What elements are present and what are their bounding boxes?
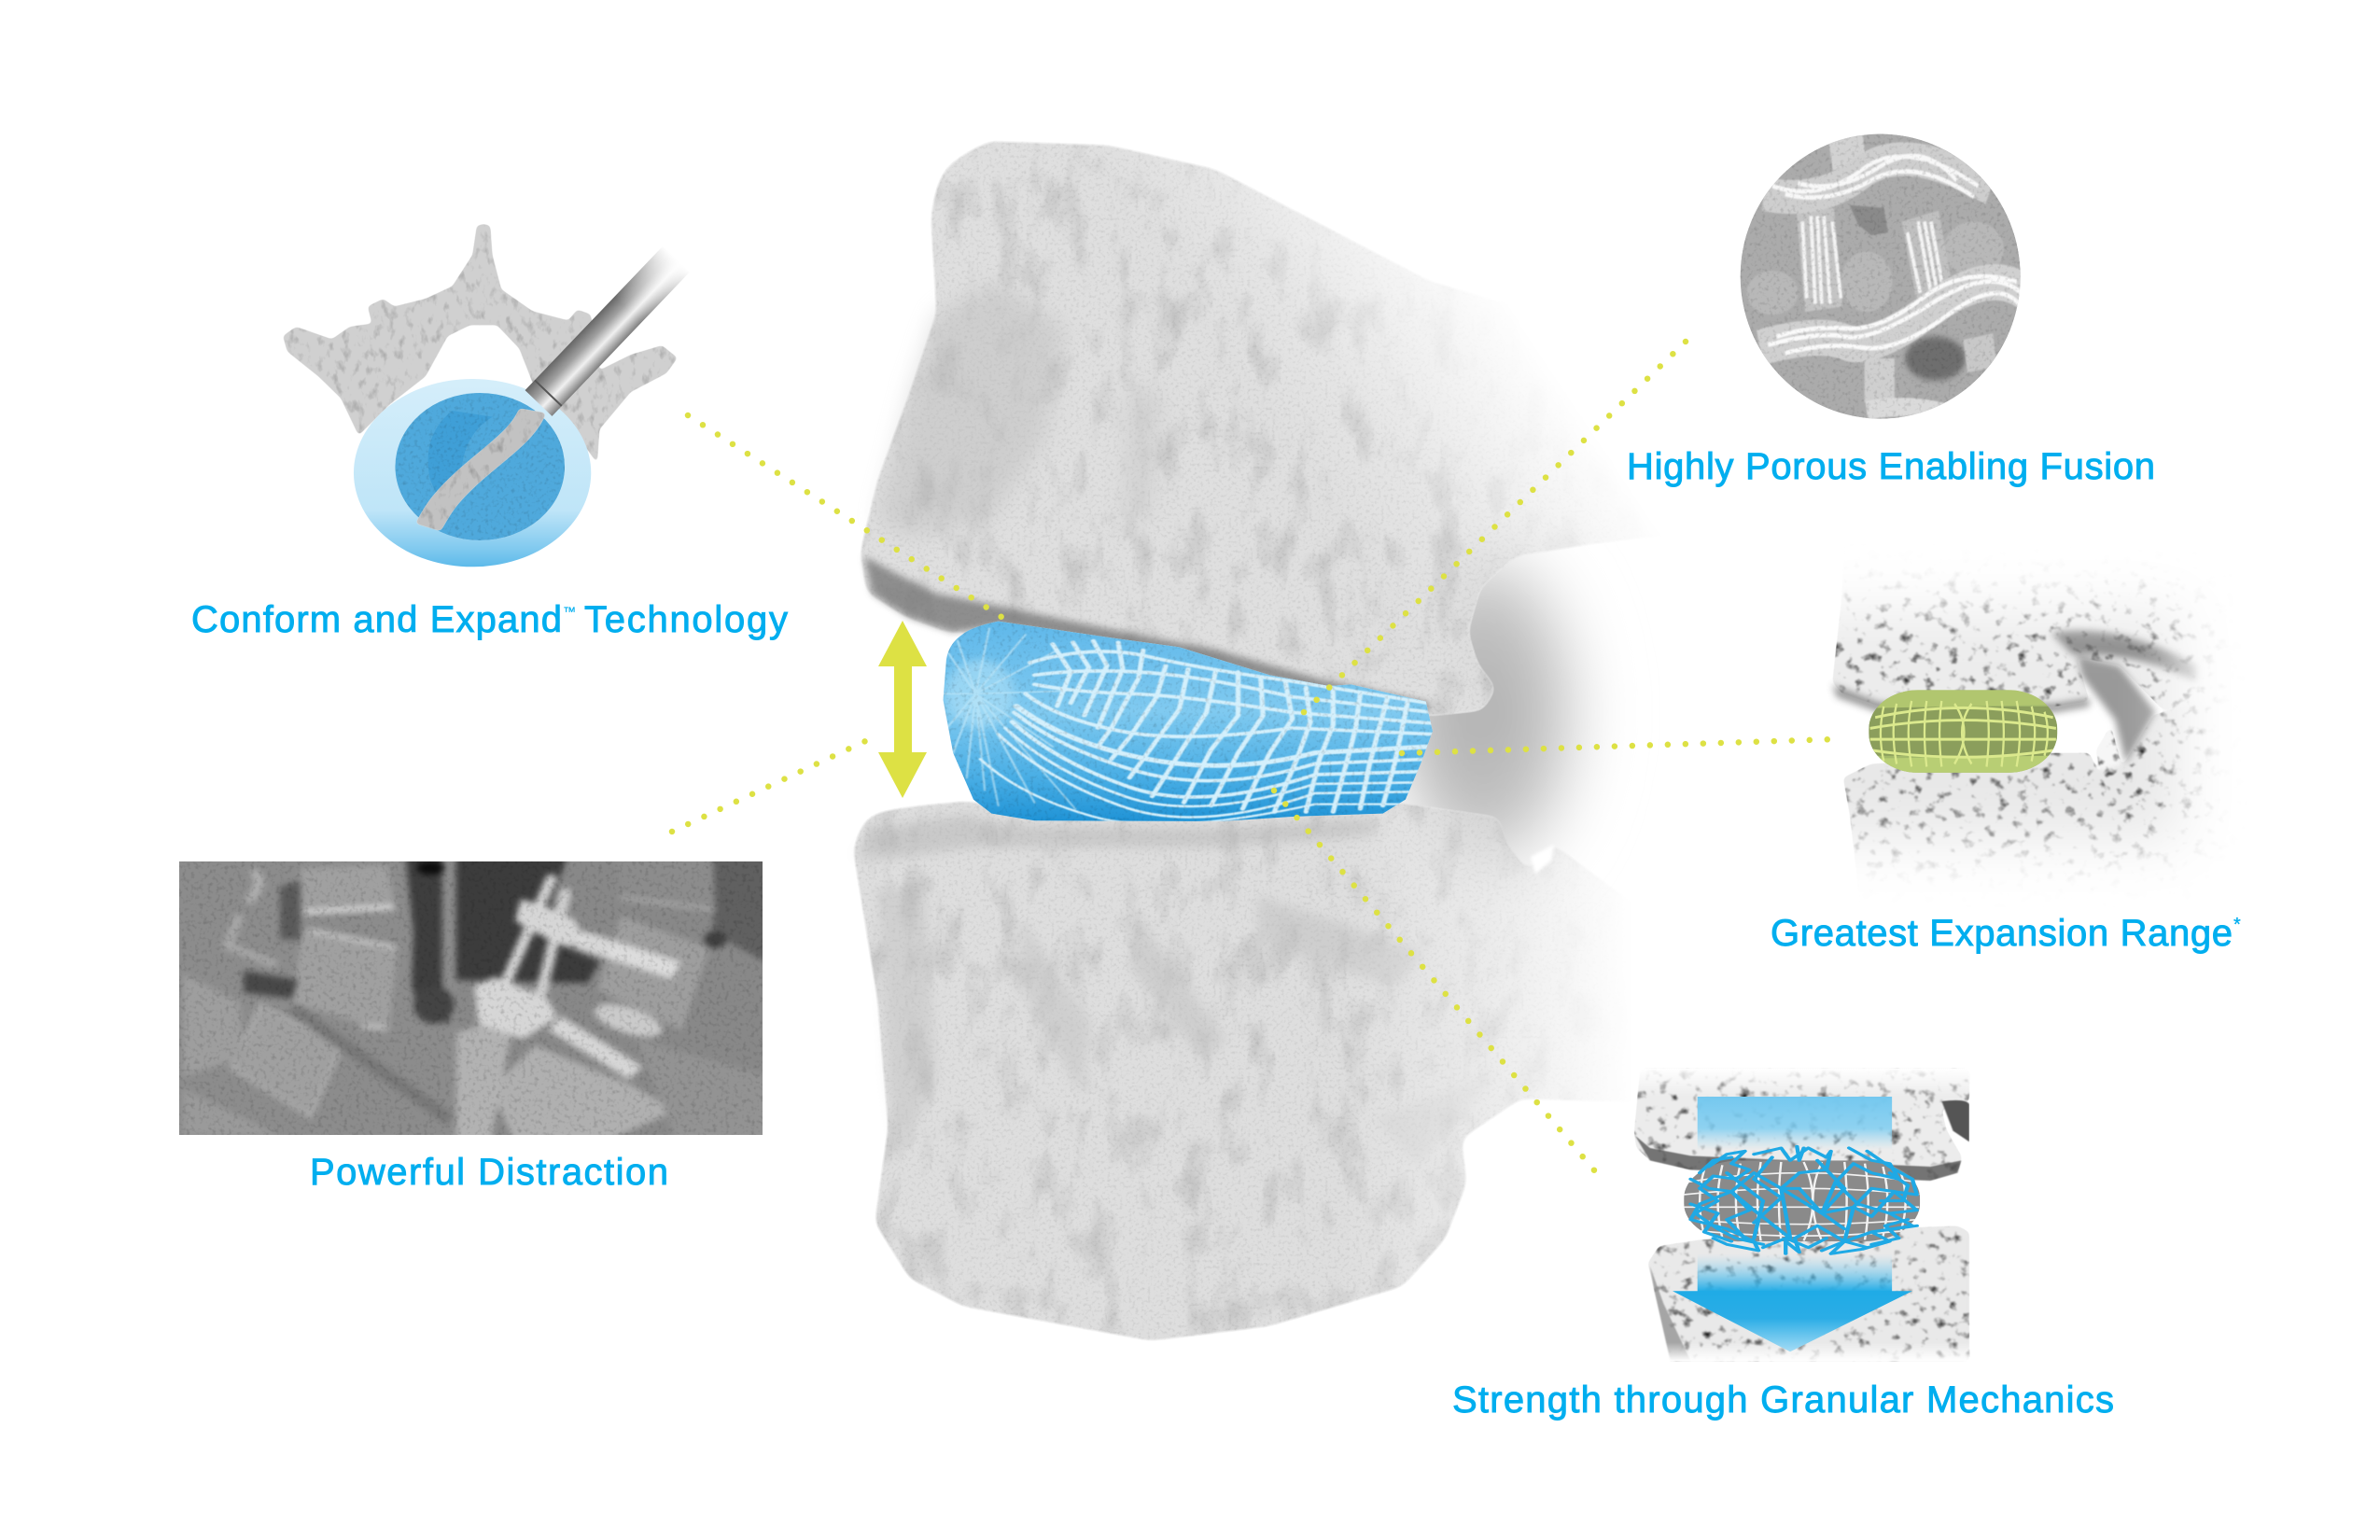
central spine illustration: two vertebrae (853, 141, 1615, 1340)
label: conform and expand: ™ (563, 604, 576, 619)
dotted leader: granular mechanics (1274, 791, 1605, 1183)
dotted leader: highly porous (1303, 342, 1686, 713)
icon: side view with green implant (1829, 569, 2219, 881)
double-headed distraction arrow (878, 621, 927, 798)
label: strength through granular mechanics: Strength through Granular Mechanics (1452, 1379, 2114, 1421)
label: conform and expand (191, 599, 788, 640)
icon: porous mesh micrograph circle (1741, 133, 2025, 419)
implant disc, blue mesh (942, 622, 1433, 824)
label: greatest expansion: Greatest Expansion Range (1771, 913, 2233, 954)
label: greatest expansion: * (2233, 915, 2241, 935)
dotted leader: powerful distraction (672, 736, 875, 832)
panel: compression diagram with granular mesh (1634, 1061, 1969, 1369)
label: highly porous: Highly Porous Enabling Fusion (1627, 446, 2155, 487)
right half anatomy (456, 852, 772, 1141)
dotted leader: greatest expansion (1402, 739, 1835, 753)
label: powerful distraction: Powerful Distraction (310, 1152, 668, 1193)
label: conform and expand: Technology (584, 599, 788, 640)
label: conform and expand: Conform and Expand (191, 599, 562, 640)
icon: vertebra top view with inserter and implant (283, 224, 693, 567)
dotted leader: conform and expand (688, 415, 1001, 617)
panel: x-ray before and after (171, 852, 772, 1141)
